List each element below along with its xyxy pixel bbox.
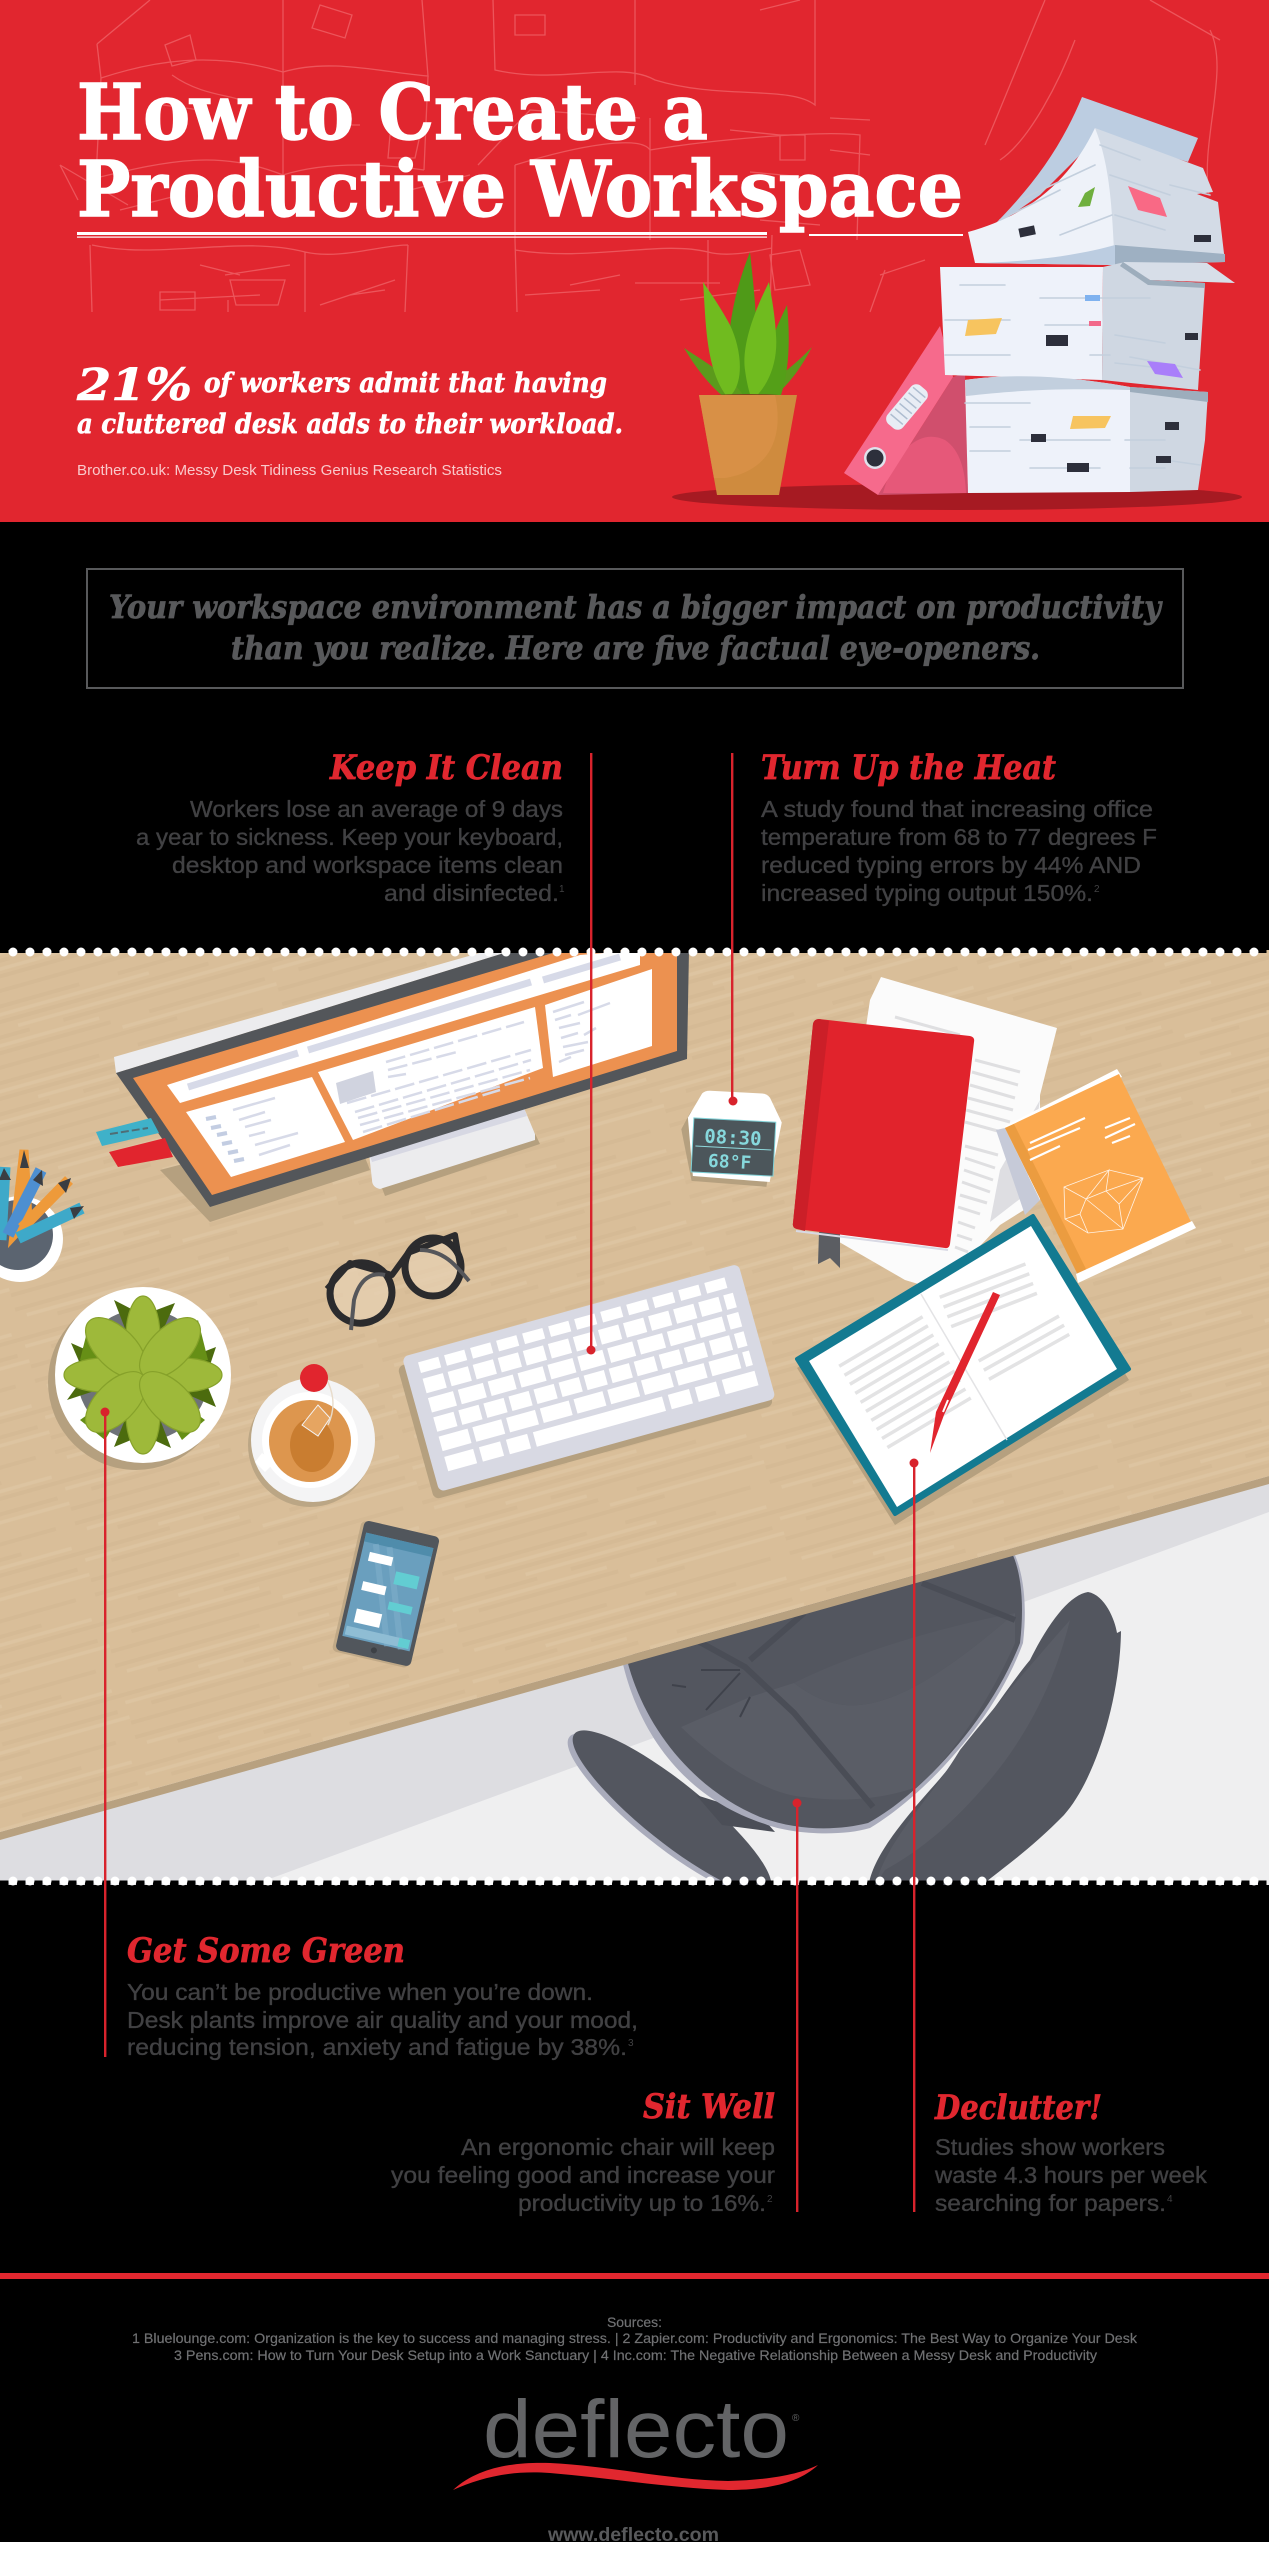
tip: declutter: Declutter!	[934, 2088, 1102, 2128]
website url: www.deflecto.com	[547, 2525, 719, 2546]
tip: turn up the heat: reduced typing errors by 44% AND	[761, 852, 1141, 878]
icon: succulent plant	[48, 1287, 231, 1470]
sources: 1 Bluelounge.com: Organization is the key to success and managing stress. | 2 Zapier.com: Productivity and Ergonomics: The Best Way to Organize Your Desk	[132, 2330, 1138, 2346]
icon: desk clock	[679, 1089, 783, 1187]
source note: Brother.co.uk: Messy Desk Tidiness Genius Research Statistics	[77, 462, 502, 479]
callout line: keep it clean	[586, 753, 596, 1354]
callout line: sit well	[792, 1798, 802, 2212]
tip: keep it clean: a year to sickness. Keep your keyboard,	[136, 824, 563, 850]
icon: pencil cup	[0, 1150, 84, 1282]
sticky tabs	[96, 1118, 173, 1167]
floor	[0, 1476, 1269, 1885]
tip: sit well: 2	[767, 2194, 773, 2205]
tip: turn up the heat: A study found that increasing office	[761, 796, 1153, 822]
sources	[132, 2314, 1138, 2363]
tip: sit well: An ergonomic chair will keep	[461, 2134, 775, 2160]
title	[77, 68, 963, 238]
tip: turn up the heat: 2	[1094, 884, 1100, 895]
statistic callout: of workers admit that having	[204, 368, 607, 399]
intro text box: Your workspace environment has a bigger impact on productivity	[109, 588, 1163, 626]
tip: get some green: Desk plants improve air quality and your mood,	[127, 2007, 638, 2033]
stitched top edge	[0, 950, 1269, 952]
statistic callout	[76, 360, 623, 440]
tip: get some green: reducing tension, anxiety and fatigue by 38%.	[127, 2034, 627, 2060]
sketched paper stacks background	[60, 0, 1220, 312]
title: Productive Workspace	[77, 145, 963, 235]
callout line: declutter	[910, 1458, 918, 2212]
deflecto logo	[453, 2384, 818, 2490]
tip: declutter: Studies show workers	[935, 2134, 1165, 2160]
tip: sit well: productivity up to 16%.	[518, 2190, 766, 2216]
title underline	[77, 232, 963, 238]
callout line: get some green	[100, 1408, 110, 2057]
tip: sit well: you feeling good and increase your	[391, 2162, 775, 2188]
callout line: turn up the heat	[728, 753, 738, 1106]
icon: computer monitor	[96, 950, 689, 1222]
icon: open book and pen	[797, 1216, 1129, 1525]
icon: office chair	[568, 1550, 1121, 1885]
panel: desk scene	[0, 950, 1269, 1917]
intro text box	[87, 569, 1183, 688]
icon: glasses	[322, 1235, 469, 1332]
deflecto logo: ®	[792, 2413, 800, 2424]
icon: pink binder	[844, 326, 968, 495]
tip: sit well	[391, 2087, 775, 2216]
tip: turn up the heat: Turn Up the Heat	[761, 748, 1056, 788]
binder clips	[1018, 225, 1211, 472]
tip: sit well: Sit Well	[643, 2087, 775, 2127]
icon: desk clock: 68°F	[707, 1151, 752, 1174]
footer red rule	[0, 2273, 1269, 2279]
tip: get some green	[127, 1931, 638, 2060]
title: How to Create a	[77, 68, 708, 158]
stitched bottom edge	[0, 1881, 1269, 1883]
tip: get some green: You can’t be productive when you’re down.	[127, 1979, 593, 2005]
tip: declutter: searching for papers.	[935, 2190, 1166, 2216]
tip: keep it clean	[136, 748, 565, 906]
sources: 3 Pens.com: How to Turn Your Desk Setup into a Work Sanctuary | 4 Inc.com: The Negative Relationship Between a Messy Desk and Productivity	[174, 2347, 1097, 2363]
panel: red header	[0, 0, 1269, 522]
tip: keep it clean: Workers lose an average of 9 days	[190, 796, 563, 822]
deflecto logo: deflecto	[483, 2384, 789, 2475]
statistic callout: 21%	[76, 360, 192, 411]
desk surface	[0, 950, 1269, 1840]
sources: Sources:	[607, 2314, 662, 2330]
icon: paper sheets	[834, 977, 1057, 1290]
tip: turn up the heat	[761, 748, 1157, 906]
tip: keep it clean: 1	[559, 884, 565, 895]
icon: coffee cup	[248, 1364, 375, 1507]
tip: keep it clean: Keep It Clean	[329, 748, 563, 788]
tip: keep it clean: desktop and workspace items clean	[172, 852, 563, 878]
icon: keyboard	[395, 1264, 777, 1500]
tip: turn up the heat: temperature from 68 to 77 degrees F	[761, 824, 1157, 850]
intro text box: than you realize. Here are five factual eye-openers.	[231, 629, 1040, 667]
icon: smartphone	[332, 1519, 440, 1669]
tip: declutter: waste 4.3 hours per week	[934, 2162, 1207, 2188]
floor shadow	[672, 484, 1242, 510]
tip: get some green: Get Some Green	[127, 1931, 405, 1971]
icon: red notebook	[793, 1019, 974, 1268]
tip: declutter	[934, 2088, 1207, 2216]
icon: potted plant	[684, 252, 812, 495]
icon: orange book	[996, 1069, 1196, 1283]
icon: stack of papers	[940, 97, 1235, 493]
tip: get some green: 3	[628, 2038, 634, 2049]
tip: keep it clean: and disinfected.	[384, 880, 559, 906]
tip: declutter: 4	[1167, 2194, 1173, 2205]
tip: turn up the heat: increased typing output 150%.	[761, 880, 1093, 906]
statistic callout: a cluttered desk adds to their workload.	[77, 409, 623, 440]
icon: desk clock: 08:30	[704, 1126, 762, 1150]
sticky notes	[965, 186, 1183, 429]
